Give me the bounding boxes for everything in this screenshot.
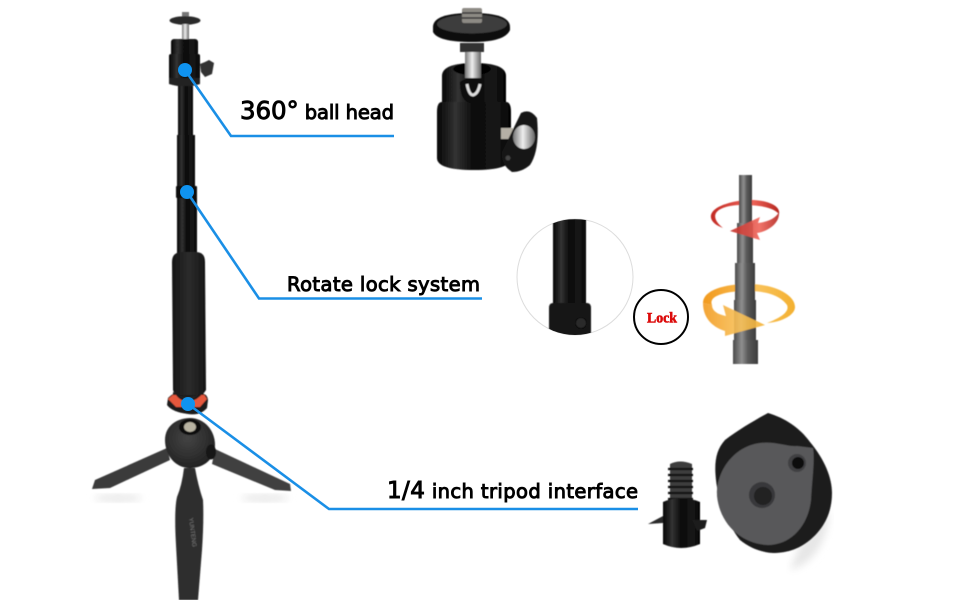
photo: tripod screw xyxy=(648,462,707,548)
foam grip xyxy=(172,252,206,400)
callout line: rotate lock xyxy=(187,192,482,298)
tripod: YUNTENG xyxy=(187,518,197,548)
disc shadow xyxy=(790,510,830,570)
photo: grey pole with rotation arrows xyxy=(703,175,795,364)
zoom circle: rotate lock collar xyxy=(517,219,633,340)
photo: foam disc with threaded plate xyxy=(715,413,832,570)
label: rotate lock system: Rotate lock system xyxy=(287,273,480,296)
photo: extension pole with tripod xyxy=(92,12,291,600)
callout line: tripod interface xyxy=(188,404,638,509)
photo: ball head detail xyxy=(433,8,538,172)
ball head plate xyxy=(433,8,510,52)
tripod xyxy=(92,418,291,600)
mini ball head on top of pole xyxy=(169,12,214,86)
blue dot: ball head xyxy=(178,63,192,77)
blue dot: interface xyxy=(181,397,195,411)
orange arrow back xyxy=(703,284,795,323)
grey pole xyxy=(733,175,758,364)
telescopic sections xyxy=(176,86,197,253)
orange rotation arrow xyxy=(703,303,765,336)
callout line: 360 ball head xyxy=(185,70,394,136)
badge: lock xyxy=(634,290,688,344)
badge: lock: Lock xyxy=(647,310,678,326)
label: 360 ball head: 360° ball head xyxy=(240,96,394,125)
red rotation arrow xyxy=(730,212,779,240)
tripod leg shadows xyxy=(94,494,289,502)
orange base plate xyxy=(167,392,208,414)
ball head knob xyxy=(501,111,538,172)
ball head body xyxy=(437,52,511,170)
label: tripod interface: 1/4 inch tripod interface xyxy=(387,478,638,504)
blue dot: rotate lock xyxy=(180,185,194,199)
red arrow back xyxy=(711,200,779,228)
